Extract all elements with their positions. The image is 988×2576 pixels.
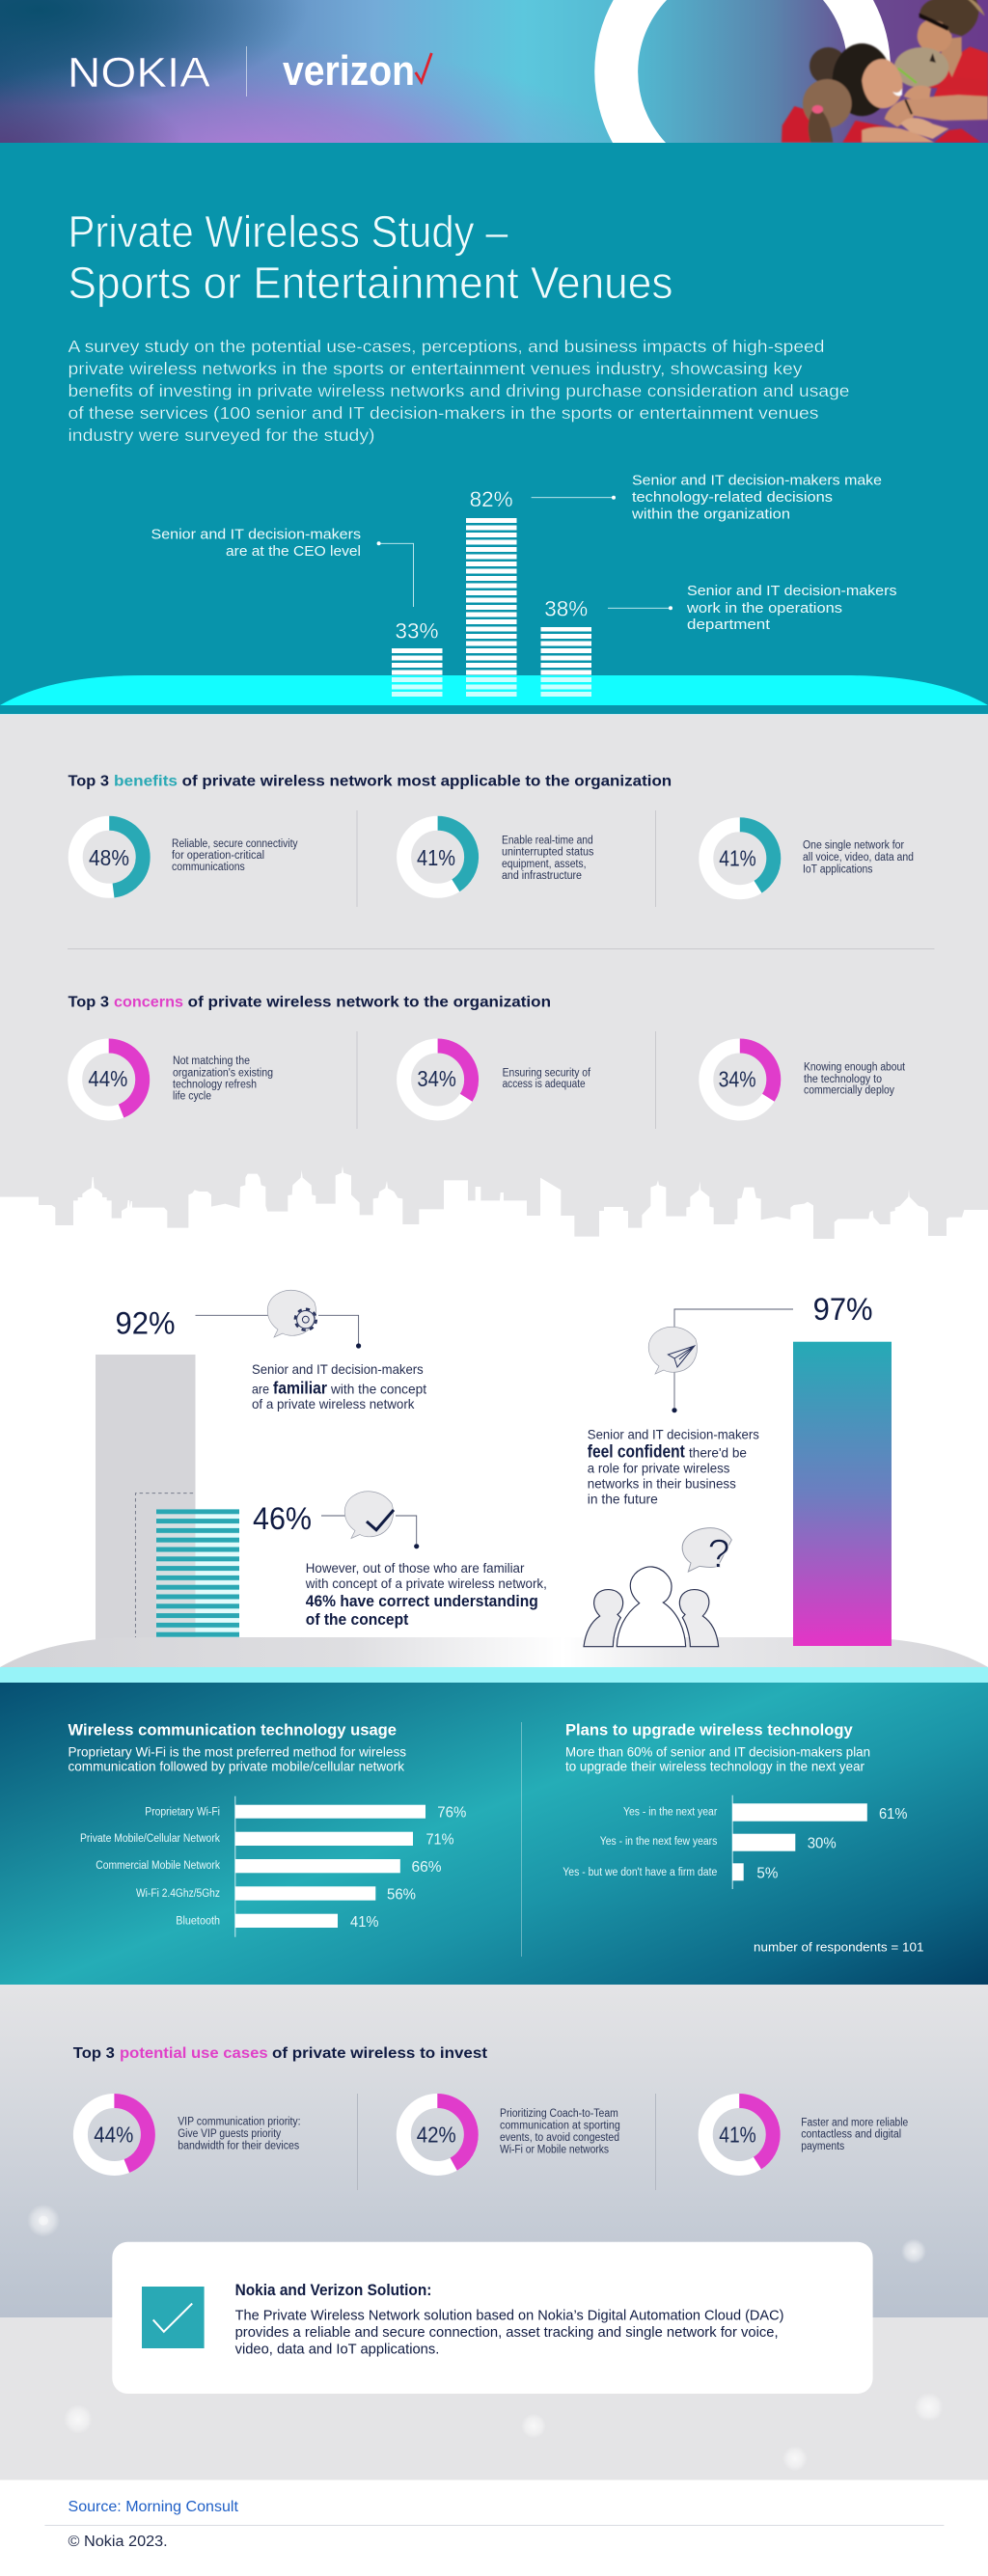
bar chart: usage: 76%	[437, 1804, 466, 1821]
teal chart panel	[0, 1683, 988, 1985]
use case: 42%: Prioritizing Coach-to-Team	[500, 2108, 618, 2120]
use case: 44%	[80, 2101, 301, 2169]
bar chart: usage: Private Mobile/Cellular Network	[80, 1833, 220, 1845]
cyan strip	[0, 1667, 988, 1683]
concern: 44%: Not matching the	[173, 1055, 250, 1067]
text: correct understanding: of the concept	[306, 1611, 409, 1629]
heading: benefits: of private wireless network most applicable to the organization	[182, 773, 672, 789]
intro paragraph: private wireless networks in the sports or entertainment venues industry, showcasing key	[68, 359, 803, 378]
logo divider	[246, 46, 247, 96]
stage platform	[0, 1637, 988, 1667]
callout: technology decisions	[532, 473, 882, 523]
benefit: 41% real-time	[404, 823, 594, 891]
text: confident: a role for private wireless	[588, 1461, 729, 1476]
bar chart: usage: Commercial Mobile Network	[96, 1860, 220, 1872]
benefit: 41% real-time: equipment, assets,	[502, 859, 587, 870]
benefit: 41% real-time: uninterrupted status	[502, 846, 594, 858]
bar: 33% CEO level: 33%	[396, 619, 438, 644]
benefit: 41% single network: 41%	[719, 846, 756, 871]
footer	[0, 2480, 988, 2576]
callout: operations	[608, 583, 897, 633]
white ring decoration	[594, 0, 891, 143]
callout: technology decisions: within the organization	[631, 507, 790, 523]
source: Source: Morning Consult	[68, 2499, 238, 2515]
benefit: 48%: Reliable, secure connectivity	[172, 838, 298, 850]
bar chart: usage: Wi-Fi 2.4Ghz/5Ghz	[136, 1888, 220, 1900]
text: correct understanding	[305, 1560, 547, 1629]
concern: 34% security: Ensuring security of	[503, 1067, 591, 1079]
respondents note: number of respondents = 101	[754, 1939, 924, 1954]
title: Private Wireless Study –	[68, 206, 508, 257]
solution text: The Private Wireless Network solution based on Nokia’s Digital Automation Cloud (DAC)	[235, 2308, 784, 2323]
photo: celebrating players	[782, 0, 988, 143]
text: confident: networks in their business	[588, 1476, 736, 1492]
bar: 38% operations	[540, 597, 591, 697]
text: confident: there'd be	[689, 1445, 747, 1461]
benefit: 48%: communications	[172, 862, 245, 873]
title: Sports or Entertainment Venues	[68, 258, 673, 308]
text: familiar: with the concept	[330, 1381, 426, 1396]
92% label and connector: 92%	[116, 1306, 176, 1341]
text: familiar	[252, 1361, 426, 1411]
callout: operations: department	[687, 617, 771, 633]
97% label and connector: 97%	[813, 1292, 873, 1327]
intro paragraph: A survey study on the potential use-cases, perceptions, and business impacts of high-speed	[68, 337, 824, 356]
callout: CEO level: Senior and IT decision-makers	[151, 527, 361, 543]
text: confident: in the future	[588, 1491, 658, 1506]
text: correct understanding: with concept of a private wireless network,	[305, 1576, 547, 1591]
icon: check box	[142, 2287, 205, 2348]
concern: 34% security	[404, 1046, 591, 1113]
icon: speech bubble with gear	[267, 1290, 316, 1337]
cyan dome	[0, 675, 988, 705]
use case: 41%	[705, 2101, 908, 2169]
bar chart: usage: 71%	[426, 1831, 453, 1848]
icon: speech bubble with paper plane	[648, 1327, 697, 1374]
bar chart: usage: 66%	[411, 1859, 442, 1876]
use case: 42%: communication at sporting	[500, 2121, 620, 2132]
text: familiar: Senior and IT decision-makers	[252, 1361, 424, 1377]
text: familiar: of a private wireless network	[252, 1396, 415, 1411]
concern: 34% knowledge: Knowing enough about	[804, 1061, 906, 1073]
46% label and connector	[253, 1501, 419, 1548]
benefit: 41% real-time: and infrastructure	[502, 870, 582, 882]
usage heading: Proprietary Wi-Fi is the most preferred method for wireless	[68, 1743, 406, 1759]
gray use cases panel	[0, 1985, 988, 2480]
text: correct understanding: 46% have correct understanding	[306, 1593, 538, 1610]
intro paragraph: industry were surveyed for the study)	[68, 425, 374, 445]
heading: benefits: Top 3	[68, 773, 109, 789]
concern: 34% security: access is adequate	[503, 1079, 586, 1090]
text: correct understanding: However, out of those who are familiar	[306, 1560, 525, 1576]
use case: 44%: 44%	[94, 2122, 133, 2147]
benefit: 41% single network: One single network for	[803, 839, 904, 851]
bar chart: upgrade plans	[563, 1795, 907, 1889]
heading: use cases: potential use cases	[120, 2045, 268, 2062]
upgrade heading: Plans to upgrade wireless technology	[565, 1720, 853, 1739]
benefit: 48%: 48%	[89, 845, 129, 870]
text: confident: Senior and IT decision-makers	[588, 1427, 759, 1442]
text: familiar: familiar	[273, 1378, 327, 1397]
bar: 82% technology decisions	[466, 487, 517, 697]
solution card	[112, 2242, 873, 2394]
use case: 42%: Wi-Fi or Mobile networks	[500, 2145, 609, 2156]
intro paragraph: benefits of investing in private wireless networks and driving purchase consideration and usage	[68, 381, 849, 400]
icon: speech bubble with check	[344, 1492, 394, 1538]
concern: 44%: organization's existing	[173, 1067, 273, 1079]
bar chart: usage: 41%	[350, 1914, 378, 1931]
copyright: © Nokia 2023.	[68, 2534, 168, 2550]
heading: concerns: of private wireless network to the organization	[188, 995, 551, 1011]
logo: Verizon: verizon	[283, 47, 415, 95]
usage heading: Wireless communication technology usage	[68, 1720, 397, 1739]
use case: 44%: Give VIP guests priority	[178, 2128, 281, 2140]
bar chart: usage: Bluetooth	[176, 1916, 220, 1928]
text: confident: feel confident	[588, 1442, 685, 1462]
use case: 41%: 41%	[719, 2122, 756, 2147]
concern: 34% knowledge: commercially deploy	[804, 1085, 894, 1097]
callout: CEO level: are at the CEO level	[226, 543, 361, 560]
solution text: video, data and IoT applications.	[235, 2342, 439, 2357]
use case: 44%: VIP communication priority:	[178, 2116, 301, 2127]
logo: Nokia: NOKIA	[68, 49, 211, 96]
benefit: 41% real-time: 41%	[417, 845, 455, 870]
benefit: 48%: for operation-critical	[172, 850, 264, 862]
icon: three people with question bubble: ?	[707, 1531, 730, 1576]
title	[68, 206, 673, 308]
bar: 33% CEO level	[392, 619, 442, 697]
glowing dots	[27, 2205, 944, 2471]
concern: 44%: life cycle	[173, 1090, 211, 1102]
heading: use cases: Top 3	[73, 2045, 115, 2062]
concern: 34% knowledge: 34%	[719, 1067, 756, 1092]
use case: 41%: payments	[801, 2141, 844, 2152]
bar: 38% operations: 38%	[544, 597, 588, 621]
solution text	[235, 2282, 784, 2357]
benefit: 41% single network: IoT applications	[803, 864, 873, 876]
use case: 41%: Faster and more reliable	[801, 2118, 908, 2129]
bar: 97% gradient	[793, 1342, 892, 1646]
bar chart: upgrade plans: Yes - in the next year	[623, 1806, 717, 1818]
solution text: provides a reliable and secure connection, asset tracking and single network for voice,	[235, 2325, 779, 2341]
bar chart: upgrade plans: 61%	[879, 1806, 907, 1822]
upgrade heading: to upgrade their wireless technology in the next year	[565, 1759, 864, 1774]
bar: 92% gray	[96, 1355, 195, 1646]
callout: operations: work in the operations	[686, 600, 842, 617]
bar chart: upgrade plans: Yes - but we don't have a firm date	[563, 1867, 717, 1878]
upgrade heading: More than 60% of senior and IT decision-makers plan	[565, 1743, 870, 1759]
concern: 34% security: 34%	[417, 1066, 456, 1091]
usage heading: communication followed by private mobile/cellular network	[68, 1759, 405, 1774]
bar chart: usage: Proprietary Wi-Fi	[145, 1807, 220, 1819]
text: confident	[588, 1427, 759, 1506]
gray benefits and concerns panel	[0, 714, 988, 1255]
bar: 46% striped	[156, 1509, 239, 1647]
text: familiar: are	[252, 1381, 269, 1396]
callout: CEO level	[151, 527, 413, 607]
callout: technology decisions: technology-related decisions	[632, 489, 833, 506]
heading: concerns: concerns	[114, 995, 183, 1011]
teal intro panel	[0, 143, 988, 714]
callout: technology decisions: Senior and IT decision-makers make	[632, 473, 882, 489]
skyline	[0, 1165, 988, 1254]
heading: use cases	[73, 2045, 488, 2062]
bar chart: usage: 56%	[387, 1887, 416, 1904]
use case: 42%: events, to avoid congested	[500, 2132, 619, 2144]
heading: concerns: Top 3	[68, 995, 109, 1011]
benefit: 41% single network	[706, 825, 914, 892]
upgrade heading	[565, 1720, 870, 1774]
97% label and connector	[672, 1292, 873, 1412]
callout: operations: Senior and IT decision-makers	[687, 583, 897, 599]
heading: use cases: of private wireless to invest	[272, 2045, 488, 2062]
concern: 34% knowledge	[706, 1046, 906, 1113]
heading: benefits: benefits	[114, 773, 178, 789]
bar chart: upgrade plans: 30%	[808, 1836, 837, 1852]
white awareness panel with skyline	[0, 1165, 988, 1683]
92% label and connector	[116, 1306, 361, 1349]
intro paragraph: of these services (100 senior and IT decision-makers in the sports or entertainment venues	[68, 403, 819, 423]
use case: 42%	[403, 2101, 620, 2169]
use case: 41%: contactless and digital	[801, 2129, 901, 2141]
icon: three people with question bubble	[584, 1528, 731, 1647]
concern: 34% knowledge: the technology to	[804, 1074, 882, 1085]
bar chart: upgrade plans: 5%	[756, 1865, 778, 1881]
header banner	[0, 0, 988, 143]
use case: 44%: bandwidth for their devices	[178, 2140, 299, 2151]
46% label and connector: 46%	[253, 1501, 312, 1536]
bar chart: upgrade plans: Yes - in the next few years	[600, 1836, 718, 1848]
bar: 82% technology decisions: 82%	[470, 487, 513, 511]
concern: 44%: 44%	[88, 1066, 127, 1091]
concern: 44%	[75, 1046, 273, 1113]
benefit: 41% single network: all voice, video, data and	[803, 852, 914, 863]
benefit: 48%	[75, 823, 298, 891]
bar chart: usage	[80, 1796, 466, 1937]
benefit: 41% real-time: Enable real-time and	[502, 835, 593, 846]
intro paragraph	[68, 337, 849, 445]
dashed guide	[135, 1494, 195, 1646]
concern: 44%: technology refresh	[173, 1079, 257, 1090]
use case: 42%: 42%	[417, 2122, 456, 2147]
solution text: Nokia and Verizon Solution:	[235, 2282, 431, 2299]
usage heading	[68, 1720, 406, 1774]
